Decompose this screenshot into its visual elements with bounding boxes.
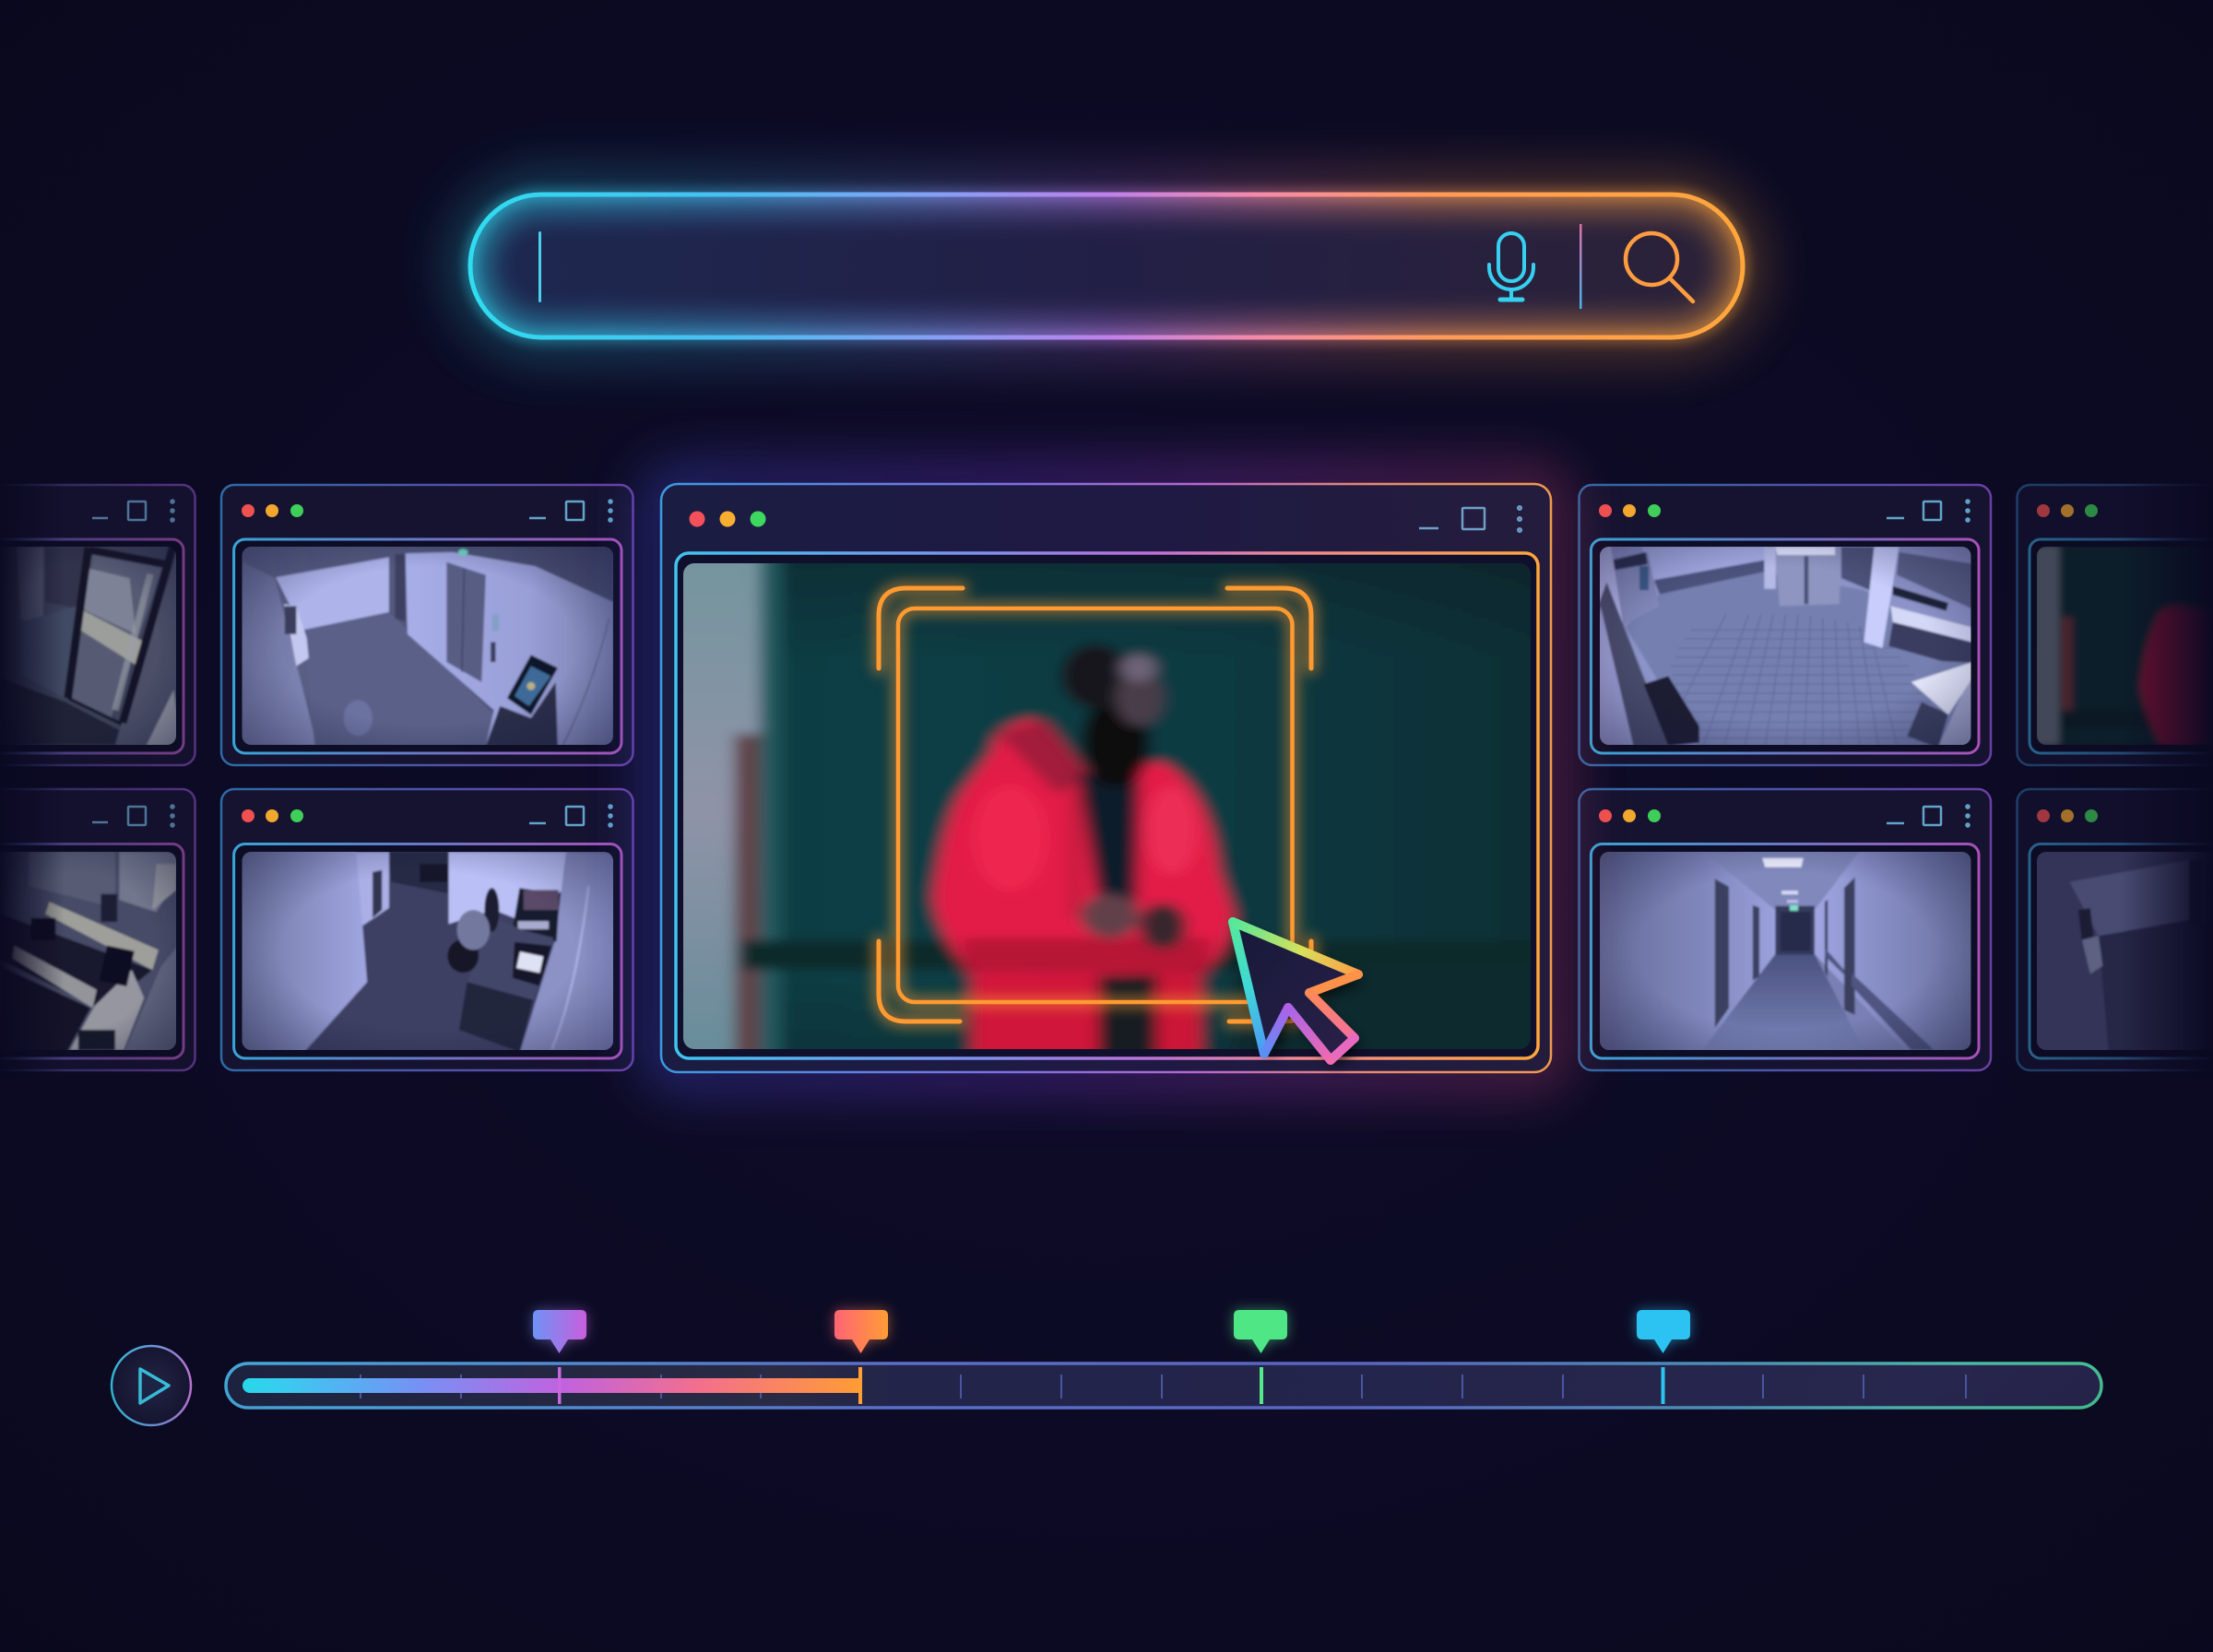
panel: main highlighted camera window (586, 484, 1681, 1110)
blurred photo: person in red jacket (683, 563, 1531, 1049)
panel: right column partial camera bottom (2018, 789, 2213, 1070)
window dots (242, 809, 303, 822)
window controls (1887, 806, 1970, 826)
window glow (661, 484, 1551, 1072)
video frame (2030, 539, 2213, 753)
panel: camera window lobby (221, 485, 633, 765)
marker flag: orange (834, 1310, 888, 1353)
window controls (529, 806, 612, 826)
icon: microphone (1489, 233, 1533, 300)
video frame (2030, 844, 2213, 1058)
edge fade right (2121, 479, 2213, 1079)
video frame (0, 539, 183, 753)
window controls (92, 500, 173, 522)
edge fade left (0, 479, 65, 1079)
window dots (690, 511, 765, 527)
window dots (1599, 504, 1661, 517)
window controls (1419, 506, 1521, 532)
camera image: tiled lobby (1596, 544, 1975, 748)
window controls (1887, 500, 1970, 522)
window dots (242, 504, 303, 517)
camera image: corridor (1596, 848, 1975, 1054)
camera image: open office (6, 852, 176, 1050)
progress fill (243, 1378, 860, 1393)
camera image: elevator lobby (239, 544, 618, 748)
video frame (0, 844, 183, 1058)
window controls (92, 806, 173, 826)
video frame (234, 844, 621, 1058)
detection box (879, 588, 1311, 1021)
window dots (2037, 504, 2098, 517)
panel: right column partial camera top (2018, 485, 2213, 765)
play button (112, 1346, 191, 1425)
marker lines (558, 1367, 1665, 1404)
search bar (470, 195, 1743, 337)
icon: magnifying glass (1626, 233, 1693, 301)
video frame (676, 553, 1538, 1058)
icon: play triangle (140, 1369, 169, 1403)
window controls (529, 500, 612, 522)
panel: camera window office desk (221, 789, 633, 1070)
marker flag: blue (1637, 1310, 1690, 1353)
camera image: office with seated person (239, 848, 618, 1054)
camera image: person in red, dimmed (2029, 544, 2213, 747)
marker flag: purple (533, 1310, 586, 1353)
camera image: glass doors (7, 547, 176, 745)
tick marks (361, 1375, 1966, 1398)
infographic scene (3, 142, 2207, 1427)
panel: camera window reception (1579, 485, 1991, 765)
video frame (234, 539, 621, 753)
video frame (1591, 844, 1979, 1058)
track (226, 1363, 2101, 1408)
panel: camera window corridor (1579, 789, 1991, 1070)
window dots (2037, 809, 2098, 822)
divider (1580, 224, 1582, 309)
text caret (538, 231, 541, 302)
timeline (226, 1363, 2101, 1408)
icon: cursor arrow (1233, 922, 1364, 1068)
panel: left column partial camera bottom (0, 789, 195, 1070)
video frame (1591, 539, 1979, 753)
window dots (1599, 809, 1661, 822)
camera image: lobby, dimmed (2037, 852, 2200, 1050)
marker flag: green (1234, 1310, 1287, 1353)
inner box (898, 608, 1293, 1002)
panel: left column partial camera top (0, 485, 195, 765)
corner brackets (879, 588, 1311, 1021)
